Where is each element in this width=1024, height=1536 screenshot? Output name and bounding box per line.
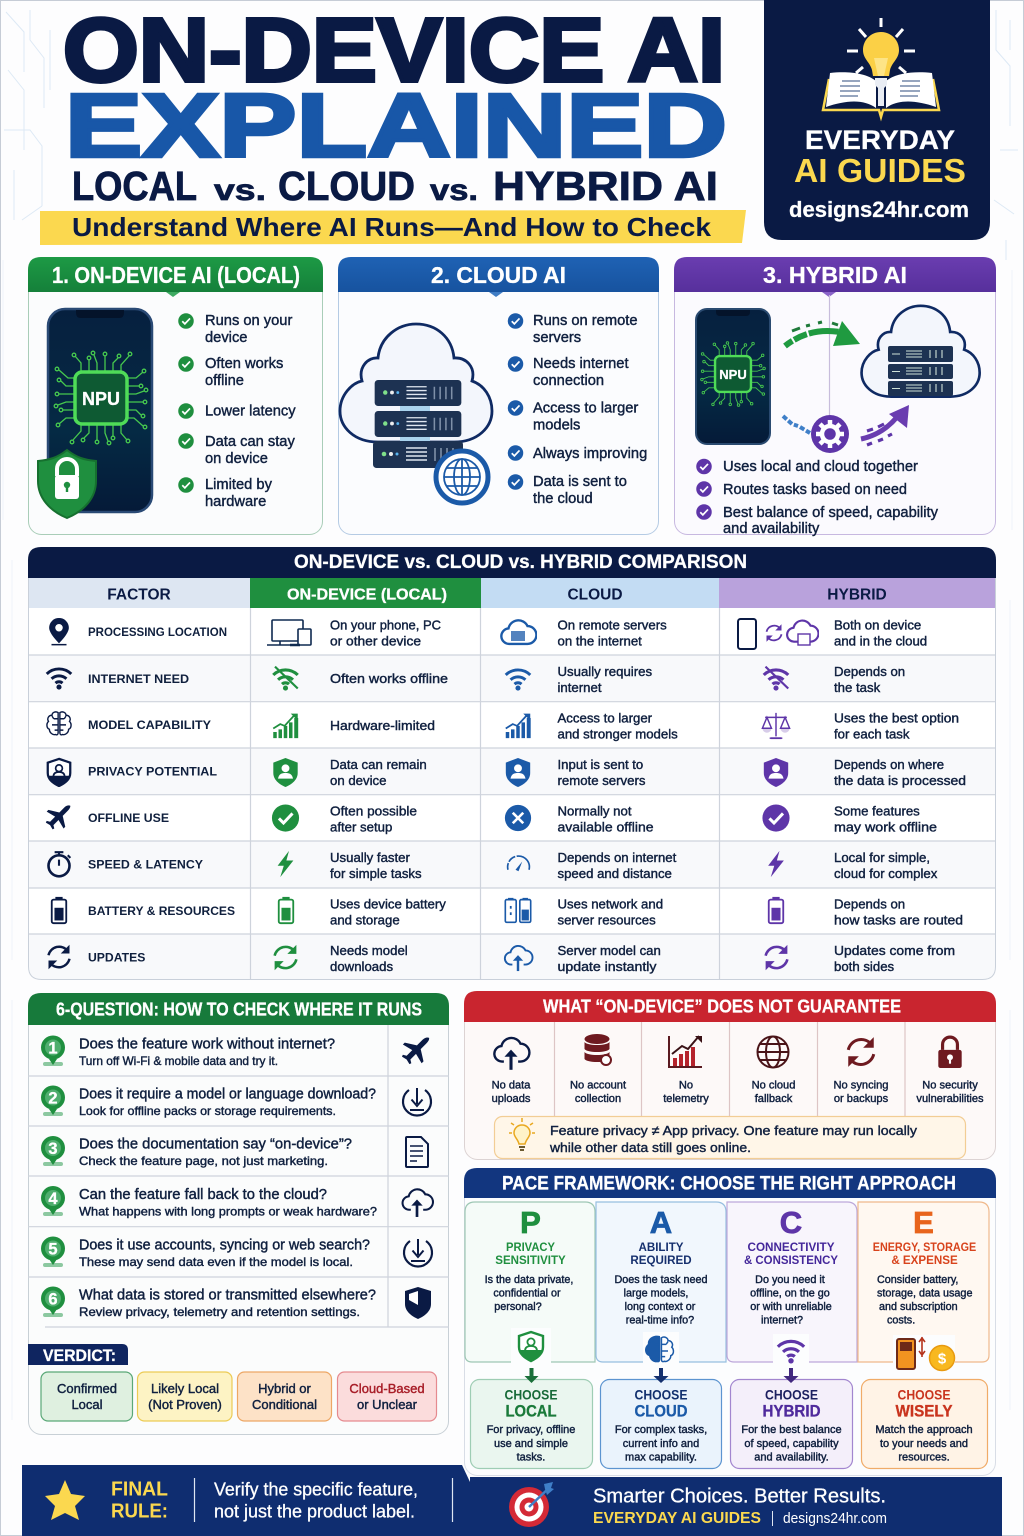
card: choose hybrid: For the best balance [741, 1424, 842, 1436]
card: A ability required: REQUIRED [630, 1254, 692, 1267]
table title: ON-DEVICE vs. CLOUD vs. HYBRID COMPARISON [294, 552, 747, 573]
row: speed and latency [48, 850, 938, 881]
card: choose local: CHOOSE [504, 1388, 558, 1402]
feature list: Uses local and cloud together [723, 459, 918, 475]
card: choose local: For privacy, offline [487, 1424, 575, 1436]
row: processing location [49, 618, 927, 649]
card: choose hybrid [730, 1380, 852, 1468]
icon: battery and coin [893, 1335, 955, 1370]
icon: green security shield [38, 450, 96, 518]
row: offline use: after setup [330, 820, 392, 834]
heading: WHAT “ON-DEVICE” DOES NOT GUARANTEE [543, 996, 901, 1016]
row: privacy potential: Depends on where [834, 757, 944, 772]
title line: EXPLAINED: EXPLAINED [65, 76, 727, 176]
row: battery and resources: how tasks are routed [834, 912, 963, 928]
row: internet need: internet [558, 680, 602, 695]
question 2: 2 [48, 1090, 58, 1108]
panel: on-device AI [28, 257, 323, 534]
card: C connectivity and consistency: & CONSISTENCY [744, 1254, 838, 1267]
final rule label: FINAL [111, 1478, 168, 1500]
question 1: 1 [48, 1040, 58, 1058]
column headers: FACTOR [107, 586, 171, 604]
row: speed and latency: Local for simple, [834, 850, 930, 865]
question 2 [41, 1086, 431, 1118]
card: choose cloud: CLOUD [634, 1402, 688, 1420]
row: battery and resources: server resources [558, 912, 656, 928]
row: internet need [47, 664, 905, 695]
row: model capability: for each task [834, 726, 910, 742]
icon: cloud with server [501, 620, 536, 644]
card: choose hybrid: HYBRID [762, 1402, 821, 1420]
row: updates: both sides [834, 959, 895, 974]
card: choose cloud: current info and [623, 1438, 699, 1450]
row: battery and resources: BATTERY & RESOURCES [88, 904, 235, 918]
row: updates: Needs model [330, 943, 408, 958]
brand badge [764, 0, 990, 240]
row: privacy potential: the data is processed [834, 773, 966, 788]
row: internet need: Often works offline [330, 671, 448, 686]
card: E energy storage expense: ENERGY, STORAGE [873, 1241, 976, 1254]
subtitle: local vs cloud vs hybrid [72, 163, 718, 209]
icon: privacy shield [511, 1328, 551, 1370]
question 6: Review privacy, telemetry and retention settings. [79, 1305, 360, 1319]
card: A ability required [596, 1202, 726, 1368]
row: internet need: Depends on [834, 664, 905, 679]
item: no syncing or backups [834, 1037, 889, 1105]
card: P privacy sensitivity: confidential or [493, 1288, 561, 1300]
icon: idea bulb [509, 1118, 535, 1150]
slogan: Smarter Choices. Better Results. [593, 1486, 886, 1508]
arrow: privacy to local [524, 1368, 538, 1383]
arrow: device to cloud [785, 321, 860, 346]
icon: routing gear [811, 415, 849, 453]
feature list: Needs internet [533, 356, 629, 372]
arrow: dashed blue to router [783, 416, 810, 433]
feature list: models [533, 418, 580, 434]
feature list: Access to larger [533, 400, 638, 416]
feature list: hardware [205, 494, 266, 510]
row: privacy potential: PRIVACY POTENTIAL [88, 764, 218, 778]
icon: phone with NPU chip [48, 309, 152, 512]
card: choose wisely: resources. [898, 1452, 950, 1464]
panel: six-question check [28, 993, 449, 1434]
row: speed and latency: for simple tasks [330, 866, 422, 881]
column headers [28, 578, 996, 608]
row: battery and resources: Uses network and [558, 896, 663, 912]
heading: PACE FRAMEWORK: CHOOSE THE RIGHT APPROACH [502, 1174, 956, 1194]
verdict: likely local [138, 1372, 232, 1421]
row: speed and latency: SPEED & LATENCY [88, 858, 203, 872]
main title block [40, 1, 746, 245]
yellow tagline ribbon: Understand Where AI Runs—And How to Check [72, 212, 712, 242]
heading: 1. ON-DEVICE AI (LOCAL) [52, 262, 300, 288]
icon: cloud with servers [862, 306, 980, 397]
question 3: Does the documentation say “on-device”? [79, 1136, 352, 1152]
question 6: 6 [48, 1290, 58, 1308]
row: offline use: available offline [558, 820, 654, 834]
feature list: Data can stay [205, 434, 295, 450]
row: model capability: Access to larger [558, 710, 653, 726]
row: updates: Updates come from [834, 943, 955, 958]
card: choose hybrid: and availability. [754, 1452, 829, 1464]
row: updates [48, 943, 955, 974]
callout: feature privacy vs app privacy [494, 1116, 966, 1158]
row: processing location: PROCESSING LOCATION [88, 625, 227, 639]
card: choose cloud [600, 1380, 722, 1468]
brand website: designs24hr.com [789, 197, 969, 222]
row: battery and resources [52, 896, 963, 928]
item: no cloud fallback: No cloud [752, 1080, 795, 1092]
final rule statement [214, 1480, 418, 1522]
column headers: CLOUD [567, 586, 623, 604]
question 5: These may send data even if the model is local. [79, 1255, 353, 1269]
row: privacy potential: Input is sent to [558, 757, 643, 772]
row: speed and latency: cloud for complex [834, 866, 938, 881]
footer brand and site: designs24hr.com [783, 1511, 887, 1527]
question 1: Turn off Wi-Fi & mobile data and try it. [79, 1054, 278, 1068]
icon: phone sync cloud [738, 619, 818, 649]
heading: 2. CLOUD AI [431, 262, 566, 288]
question 4 [41, 1186, 433, 1218]
callout: feature privacy vs app privacy: Feature privacy ≠ App privacy. One feature may run locally [550, 1123, 917, 1138]
card: P privacy sensitivity: SENSITIVITY [495, 1254, 566, 1267]
final rule label [111, 1478, 168, 1522]
card: E energy storage expense [858, 1202, 989, 1370]
row: internet need: the task [834, 680, 881, 695]
verdict: hybrid or conditional: Hybrid or [258, 1381, 312, 1396]
question 3: Check the feature page, not just marketing. [79, 1154, 328, 1168]
row: updates: downloads [330, 959, 393, 974]
card: E energy storage expense: costs. [887, 1315, 915, 1327]
feature list: and availability [723, 521, 820, 537]
icon: cloud with server stack and globe [340, 324, 492, 503]
verdict: cloud based: or Unclear [357, 1397, 418, 1412]
verdict: confirmed local: Confirmed [57, 1381, 117, 1396]
card: C connectivity and consistency: Do you need it [755, 1274, 825, 1286]
icon: data shield [405, 1287, 431, 1319]
card: P privacy sensitivity: Is the data private, [485, 1274, 573, 1286]
panel: cloud AI [338, 257, 659, 534]
item: no syncing or backups: or backups [834, 1093, 889, 1105]
question 4: 4 [48, 1190, 58, 1208]
footer brand and site [593, 1510, 887, 1527]
feature list: offline [205, 373, 244, 389]
feature list: on device [205, 451, 268, 467]
brand name: AI GUIDES [794, 152, 966, 189]
card: A ability required: A [650, 1205, 672, 1240]
verdict: cloud based: Cloud-Based [349, 1381, 425, 1396]
row: offline use [46, 804, 937, 834]
heading: 6-QUESTION: HOW TO CHECK WHERE IT RUNS [56, 1000, 422, 1020]
card: choose cloud: max capability. [625, 1452, 697, 1464]
icon: star [45, 1480, 85, 1520]
item: no security vulnerabilities [916, 1037, 984, 1105]
card: P privacy sensitivity: personal? [494, 1301, 542, 1313]
card: choose local: tasks. [517, 1452, 545, 1464]
row: battery and resources: Depends on [834, 896, 905, 912]
card: choose wisely: to your needs and [880, 1438, 968, 1450]
item: no security vulnerabilities: No security [922, 1080, 978, 1092]
row: processing location: On remote servers [558, 618, 667, 632]
panel: hybrid AI [674, 257, 996, 537]
panel: PACE framework [464, 1168, 996, 1476]
row: model capability [47, 710, 959, 742]
verdict: cloud based [338, 1372, 436, 1421]
final rule statement: not just the product label. [214, 1502, 415, 1522]
item: no data uploads: No data [492, 1080, 531, 1092]
card: E energy storage expense: and subscription [879, 1301, 958, 1313]
row: processing location: or other device [330, 634, 421, 648]
row: processing location: Both on device [834, 618, 921, 632]
card: C connectivity and consistency: offline, on the go [750, 1288, 830, 1300]
feature list [508, 313, 647, 507]
row: updates: update instantly [558, 959, 657, 974]
question 6 [41, 1286, 431, 1319]
subtitle: local vs cloud vs hybrid: HYBRID AI [493, 163, 718, 209]
row: offline use: may work offline [834, 820, 937, 834]
card: C connectivity and consistency: C [780, 1205, 802, 1240]
row: speed and latency: Usually faster [330, 850, 410, 865]
item: no syncing or backups: No syncing [834, 1080, 888, 1092]
row: privacy potential: remote servers [558, 773, 646, 788]
card: C connectivity and consistency: CONNECTIVITY [748, 1241, 835, 1254]
item: no cloud fallback [752, 1036, 795, 1105]
feature list: Runs on your [205, 313, 292, 329]
card: E energy storage expense: E [913, 1205, 934, 1240]
question 1 [41, 1036, 429, 1068]
question 4: Can the feature fall back to the cloud? [79, 1187, 327, 1203]
item: no telemetry [663, 1036, 709, 1105]
footer band: final rule [22, 1465, 470, 1536]
question 6: What data is stored or transmitted elsewhere? [79, 1288, 376, 1304]
question 5 [41, 1236, 432, 1269]
verdict: hybrid or conditional: Conditional [252, 1397, 317, 1412]
card: C connectivity and consistency: internet? [761, 1315, 803, 1327]
row: internet need: Usually requires [558, 664, 652, 679]
card: choose wisely: CHOOSE [898, 1388, 950, 1402]
card: E energy storage expense: storage, data usage [877, 1288, 972, 1300]
verdict: likely local: (Not Proven) [148, 1397, 222, 1412]
final rule statement: Verify the specific feature, [214, 1480, 418, 1500]
card: A ability required: long context or [625, 1301, 696, 1313]
card: A ability required: large models, [624, 1288, 688, 1300]
row: offline use: Normally not [558, 804, 632, 818]
row: speed and latency: speed and distance [558, 866, 672, 881]
feature list [696, 459, 939, 537]
item: no telemetry: No [679, 1080, 693, 1092]
feature list: Limited by [205, 477, 273, 493]
verdict: confirmed local: Local [71, 1397, 103, 1412]
feature list: Often works [205, 356, 283, 372]
card: A ability required: Does the task need [614, 1274, 708, 1286]
question 4: What happens with long prompts or weak hardware? [79, 1204, 377, 1218]
feature list: servers [533, 330, 581, 346]
icon: battery and coin: $ [938, 1350, 947, 1368]
feature list [178, 313, 296, 510]
subtitle: local vs cloud vs hybrid: vs. [214, 174, 266, 207]
card: choose cloud: CHOOSE [634, 1388, 688, 1402]
row: offline use: Often possible [330, 804, 417, 818]
question 5: Does it use accounts, syncing or web search? [79, 1238, 370, 1254]
feature list: Data is sent to [533, 474, 627, 490]
feature list: Routes tasks based on need [723, 482, 907, 498]
row: updates: Server model can [558, 943, 661, 958]
icon: target with dart [509, 1482, 554, 1527]
row: privacy potential: on device [330, 773, 386, 788]
item: no telemetry: telemetry [663, 1093, 709, 1105]
item: no account collection: collection [575, 1093, 621, 1105]
arrow: router to cloud [861, 405, 909, 445]
icon: devices [267, 620, 311, 645]
card: choose cloud: For complex tasks, [615, 1424, 707, 1436]
column headers: HYBRID [827, 586, 887, 604]
subtitle: local vs cloud vs hybrid: vs. [430, 174, 478, 207]
verdict: likely local: Likely Local [151, 1381, 219, 1396]
callout: feature privacy vs app privacy: while other data still goes online. [549, 1140, 751, 1155]
comparison table [28, 547, 996, 980]
question 3: 3 [48, 1140, 58, 1158]
question 5: 5 [48, 1240, 58, 1258]
card: C connectivity and consistency: or with unreliable [750, 1301, 832, 1313]
row: battery and resources: Uses device battery [330, 896, 446, 912]
card: E energy storage expense: & EXPENSE [891, 1254, 958, 1267]
row: model capability: MODEL CAPABILITY [88, 718, 211, 732]
row: processing location: On your phone, PC [330, 618, 441, 632]
title line: ON-DEVICE AI: ON-DEVICE AI [63, 1, 725, 101]
subtitle: local vs cloud vs hybrid: CLOUD [278, 163, 415, 209]
row: privacy potential: Data can remain [330, 757, 427, 772]
arrow: ability to cloud [654, 1368, 668, 1383]
card: A ability required: ABILITY [638, 1241, 684, 1254]
row: battery and resources: and storage [330, 912, 400, 928]
row: model capability: Hardware-limited [330, 718, 435, 733]
feature list: Runs on remote [533, 313, 638, 329]
row: processing location: on the internet [558, 634, 642, 648]
feature list: Always improving [533, 446, 647, 462]
item: no data uploads [492, 1038, 531, 1105]
feature list: the cloud [533, 491, 593, 507]
icon: phone with NPU chip: NPU [82, 389, 120, 409]
icon: phone with NPU: NPU [719, 367, 747, 382]
column headers: ON-DEVICE (LOCAL) [287, 586, 447, 604]
feature list: device [205, 330, 247, 346]
card: E energy storage expense: Consider battery, [877, 1274, 958, 1286]
row: offline use: Some features [834, 804, 920, 818]
brand name [794, 125, 966, 189]
verdict: confirmed local [41, 1372, 132, 1421]
card: choose wisely: Match the approach [875, 1424, 973, 1436]
card: choose hybrid: CHOOSE [765, 1388, 818, 1402]
feature list: connection [533, 373, 604, 389]
footer brand and site: EVERYDAY AI GUIDES [593, 1510, 761, 1527]
card: A ability required: real-time info? [626, 1315, 694, 1327]
item: no data uploads: uploads [492, 1093, 531, 1105]
row: model capability: and stronger models [558, 726, 678, 742]
row: internet need: INTERNET NEED [88, 672, 189, 686]
footer band: brand [470, 1477, 1002, 1536]
item: no cloud fallback: fallback [755, 1093, 793, 1105]
card: choose local [470, 1380, 592, 1468]
question 1: Does the feature work without internet? [79, 1036, 335, 1052]
row: updates: UPDATES [88, 950, 145, 964]
item: no security vulnerabilities: vulnerabilities [916, 1093, 984, 1105]
arrow: connectivity to hybrid [784, 1368, 798, 1383]
card: choose hybrid: of speed, capability [744, 1438, 839, 1450]
row: processing location: and in the cloud [834, 634, 927, 648]
card: P privacy sensitivity: P [520, 1205, 541, 1240]
subtitle: local vs cloud vs hybrid: LOCAL [72, 163, 197, 209]
item: no account collection: No account [570, 1080, 626, 1092]
heading: 3. HYBRID AI [763, 262, 907, 288]
icon: document [406, 1137, 428, 1167]
question 2: Does it require a model or language download? [79, 1086, 376, 1102]
feature list: Best balance of speed, capability [723, 505, 939, 521]
item: no account collection [570, 1034, 626, 1105]
icon: wifi [773, 1334, 809, 1366]
verdict: hybrid or conditional [238, 1372, 332, 1421]
card: choose local: LOCAL [506, 1402, 556, 1420]
icon: light bulb over open book [823, 18, 939, 117]
row: model capability: Uses the best option [834, 710, 959, 726]
verdict tag [28, 1344, 128, 1365]
panel: what on-device does not guarantee [464, 991, 996, 1160]
card: C connectivity and consistency [727, 1202, 857, 1366]
feature list: Lower latency [205, 404, 296, 420]
card: P privacy sensitivity [465, 1202, 595, 1370]
card: choose wisely: WISELY [896, 1402, 952, 1420]
card: choose wisely [862, 1380, 988, 1468]
row: speed and latency: Depends on internet [558, 850, 677, 865]
question 3 [41, 1136, 428, 1168]
icon: phone with NPU [696, 309, 770, 444]
brand name: EVERYDAY [805, 125, 955, 155]
card: choose local: use and simple [494, 1438, 568, 1450]
row: privacy potential [48, 757, 966, 788]
verdict tag: VERDICT: [43, 1347, 116, 1365]
card: P privacy sensitivity: PRIVACY [506, 1241, 555, 1254]
final rule label: RULE: [111, 1500, 168, 1522]
icon: brain [643, 1332, 679, 1368]
question 2: Look for offline packs or storage requirements. [79, 1104, 336, 1118]
row: offline use: OFFLINE USE [88, 811, 169, 825]
